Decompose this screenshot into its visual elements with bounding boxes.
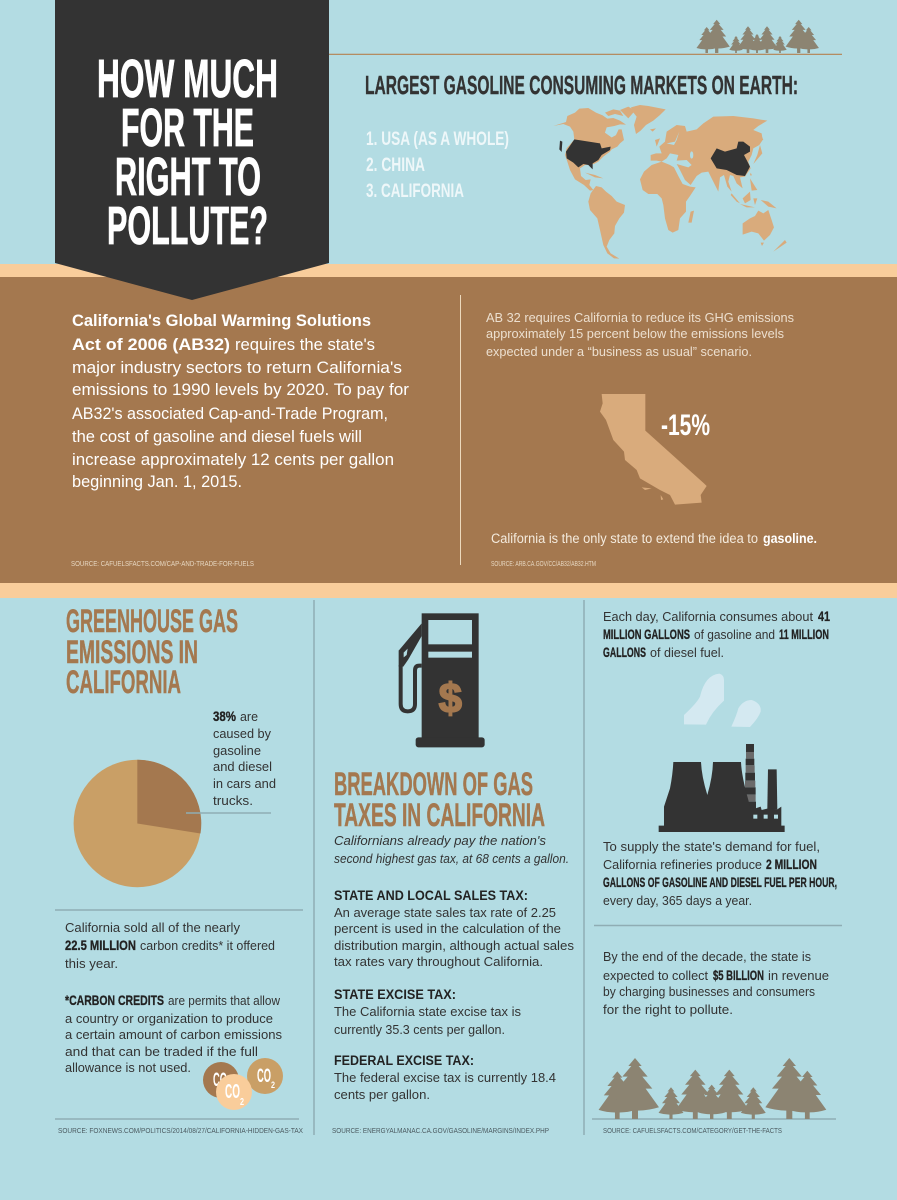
text: daily fuel consumption: of diesel fuel. bbox=[650, 645, 724, 660]
heading: breakdown of gas taxes: BREAKDOWN OF GAS bbox=[334, 766, 533, 802]
source: foxnews: SOURCE: FOXNEWS.COM/POLITICS/2014/08/27/CALIFORNIA-HIDDEN-GAS-TAX bbox=[58, 1128, 303, 1135]
text: carbon credits definition: a certain amount of carbon emissions bbox=[65, 1027, 282, 1042]
icon: CO2 bubbles: 2 bbox=[271, 1080, 275, 1090]
text: state and local sales tax: An average state sales tax rate of 2.25 bbox=[334, 905, 556, 920]
callout: 38 percent: trucks. bbox=[213, 793, 253, 808]
text: state and local sales tax: distribution margin, although actual sales bbox=[334, 938, 574, 953]
text: state excise tax: STATE EXCISE TAX: bbox=[334, 987, 456, 1002]
pie chart: 38 percent bbox=[74, 760, 271, 887]
text: carbon credits definition: are permits that allow bbox=[168, 993, 281, 1008]
text: carbon credits sold bbox=[65, 920, 275, 971]
callout: 38 percent: gasoline bbox=[213, 743, 261, 758]
callout: 38 percent bbox=[213, 708, 276, 808]
text: refinery production bbox=[603, 839, 837, 908]
text: AB32 summary: beginning Jan. 1, 2015. bbox=[72, 472, 242, 491]
source: ARB: SOURCE: ARB.CA.GOV/CC/AB32/AB32.HTM bbox=[491, 561, 596, 568]
text: 5 billion revenue: expected to collect bbox=[603, 968, 708, 983]
text: daily fuel consumption: 41 bbox=[818, 608, 830, 624]
text: refinery production: California refineries produce bbox=[603, 857, 762, 872]
text: 5 billion revenue: By the end of the decade, the state is bbox=[603, 949, 811, 964]
text: carbon credits sold: this year. bbox=[65, 956, 118, 971]
icon: CO2 bubbles bbox=[203, 1058, 283, 1110]
source: energy almanac: SOURCE: ENERGYALMANAC.CA.GOV/GASOLINE/MARGINS/INDEX.PHP bbox=[332, 1128, 549, 1135]
icon: California map bbox=[600, 394, 707, 505]
text: AB32 summary: the cost of gasoline and diesel fuels will bbox=[72, 427, 362, 446]
text: 5 billion revenue: for the right to pollute. bbox=[603, 1002, 733, 1017]
text: daily fuel consumption: of gasoline and bbox=[694, 627, 775, 642]
text: refinery production: every day, 365 days a year. bbox=[603, 893, 752, 908]
text: carbon credits sold: California sold all of the nearly bbox=[65, 920, 240, 935]
text: AB32 summary: increase approximately 12 cents per gallon bbox=[72, 450, 394, 469]
text: state excise tax bbox=[334, 987, 521, 1037]
icon: CO2 bubbles: CO bbox=[257, 1066, 271, 1087]
icon: top row of trees bbox=[696, 20, 819, 53]
heading: breakdown of gas taxes bbox=[334, 766, 545, 833]
icon: CO2 bubbles: CO bbox=[225, 1081, 240, 1103]
text: daily fuel consumption: 11 MILLION bbox=[779, 626, 829, 642]
text: state and local sales tax: tax rates vary throughout California. bbox=[334, 954, 543, 969]
text: state excise tax: currently 35.3 cents per gallon. bbox=[334, 1022, 505, 1037]
icon: gas pump bbox=[399, 613, 485, 747]
text: state and local sales tax bbox=[334, 888, 574, 969]
text: federal excise tax: The federal excise tax is currently 18.4 bbox=[334, 1070, 556, 1085]
text: carbon credits sold: carbon credits* it offered bbox=[140, 938, 275, 953]
callout: 38 percent: 38% bbox=[213, 708, 236, 724]
text: second highest gas tax: second highest gas tax, at 68 cents a gallon. bbox=[334, 851, 569, 866]
icon: bottom row of trees bbox=[599, 1058, 826, 1119]
text: carbon credits definition: allowance is not used. bbox=[65, 1060, 191, 1075]
text: state and local sales tax: STATE AND LOCAL SALES TAX: bbox=[334, 888, 528, 903]
text: AB32 emissions requirement: expected under a “business as usual” scenario. bbox=[486, 344, 752, 359]
text: AB32 summary: Act of 2006 (AB32) bbox=[72, 335, 230, 354]
title banner: FOR THE bbox=[121, 98, 254, 158]
callout: 38 percent: are bbox=[240, 709, 258, 724]
text: daily fuel consumption: Each day, California consumes about bbox=[603, 609, 813, 624]
text: state excise tax: The California state excise tax is bbox=[334, 1004, 521, 1019]
text: AB32 emissions requirement bbox=[486, 310, 794, 359]
text: only state to extend to gasoline: gasoline. bbox=[763, 531, 817, 546]
icon: CO2 bubbles: 2 bbox=[240, 1097, 244, 1108]
text: refinery production: To supply the state's demand for fuel, bbox=[603, 839, 820, 854]
brown AB32 panel bbox=[0, 277, 897, 583]
heading: breakdown of gas taxes: TAXES IN CALIFORNIA bbox=[334, 797, 545, 833]
icon: gas pump: $ bbox=[439, 675, 462, 722]
text: refinery production: 2 MILLION bbox=[766, 856, 817, 872]
heading: greenhouse gas emissions: EMISSIONS IN bbox=[66, 634, 198, 670]
callout: 38 percent: in cars and bbox=[213, 776, 276, 791]
heading: greenhouse gas emissions: CALIFORNIA bbox=[66, 664, 181, 700]
text: 5 billion revenue: in revenue bbox=[768, 968, 829, 983]
ranked list of markets: 2. CHINA bbox=[366, 155, 425, 176]
text: AB32 summary: major industry sectors to return California's bbox=[72, 358, 402, 377]
text: 5 billion revenue bbox=[603, 949, 829, 1017]
lower peach band bbox=[0, 583, 897, 598]
stat: minus 15 percent: -15% bbox=[661, 409, 710, 442]
text: second highest gas tax: Californians already pay the nation's bbox=[334, 833, 546, 848]
text: only state to extend to gasoline: California is the only state to extend the idea to bbox=[491, 531, 758, 546]
text: daily fuel consumption bbox=[603, 608, 830, 660]
icon: refinery bbox=[659, 744, 785, 832]
text: daily fuel consumption: GALLONS bbox=[603, 644, 646, 660]
text: AB32 summary: requires the state's bbox=[235, 335, 375, 354]
icon: CO2 bubbles: CO bbox=[213, 1070, 227, 1091]
text: AB32 emissions requirement: approximately 15 percent below the emissions levels bbox=[486, 326, 784, 341]
source: category get the facts: SOURCE: CAFUELSFACTS.COM/CATEGORY/GET-THE-FACTS bbox=[603, 1128, 782, 1135]
text: AB32 summary: AB32's associated Cap-and-Trade Program, bbox=[72, 404, 388, 423]
text: carbon credits definition bbox=[65, 992, 282, 1075]
text: daily fuel consumption: MILLION GALLONS bbox=[603, 626, 690, 642]
text: 5 billion revenue: by charging businesses and consumers bbox=[603, 984, 815, 999]
ranked list of markets: 3. CALIFORNIA bbox=[366, 181, 464, 202]
icon: smoke clouds bbox=[684, 674, 761, 727]
text: AB32 summary: emissions to 1990 levels by 2020. To pay for bbox=[72, 380, 409, 399]
ranked list of markets bbox=[366, 129, 509, 202]
title banner: RIGHT TO bbox=[115, 147, 261, 207]
title banner bbox=[55, 0, 329, 300]
text: AB32 emissions requirement: AB 32 requires California to reduce its GHG emissions bbox=[486, 310, 794, 325]
top peach band bbox=[0, 264, 897, 277]
text: AB32 summary bbox=[72, 311, 409, 491]
text: carbon credits sold: 22.5 MILLION bbox=[65, 937, 136, 953]
heading: greenhouse gas emissions bbox=[66, 603, 238, 700]
text: carbon credits definition: a country or organization to produce bbox=[65, 1011, 273, 1026]
ranked list of markets: 1. USA (AS A WHOLE) bbox=[366, 129, 509, 150]
title banner: POLLUTE? bbox=[107, 196, 268, 256]
world map bbox=[553, 105, 787, 259]
text: AB32 summary: California's Global Warming Solutions bbox=[72, 311, 371, 330]
text: federal excise tax: cents per gallon. bbox=[334, 1087, 430, 1102]
callout: 38 percent: caused by bbox=[213, 726, 271, 741]
text: carbon credits definition: and that can be traded if the full bbox=[65, 1044, 258, 1059]
text: 5 billion revenue: $5 BILLION bbox=[713, 967, 764, 983]
source: cap and trade: SOURCE: CAFUELSFACTS.COM/CAP-AND-TRADE-FOR-FUELS bbox=[71, 561, 254, 568]
heading: greenhouse gas emissions: GREENHOUSE GAS bbox=[66, 603, 238, 639]
text: federal excise tax: FEDERAL EXCISE TAX: bbox=[334, 1053, 474, 1068]
text: second highest gas tax bbox=[334, 833, 569, 866]
text: federal excise tax bbox=[334, 1053, 556, 1102]
title banner: HOW MUCH bbox=[97, 49, 278, 109]
callout: 38 percent: and diesel bbox=[213, 759, 272, 774]
text: state and local sales tax: percent is used in the calculation of the bbox=[334, 921, 561, 936]
text: carbon credits definition: *CARBON CREDITS bbox=[65, 992, 164, 1008]
